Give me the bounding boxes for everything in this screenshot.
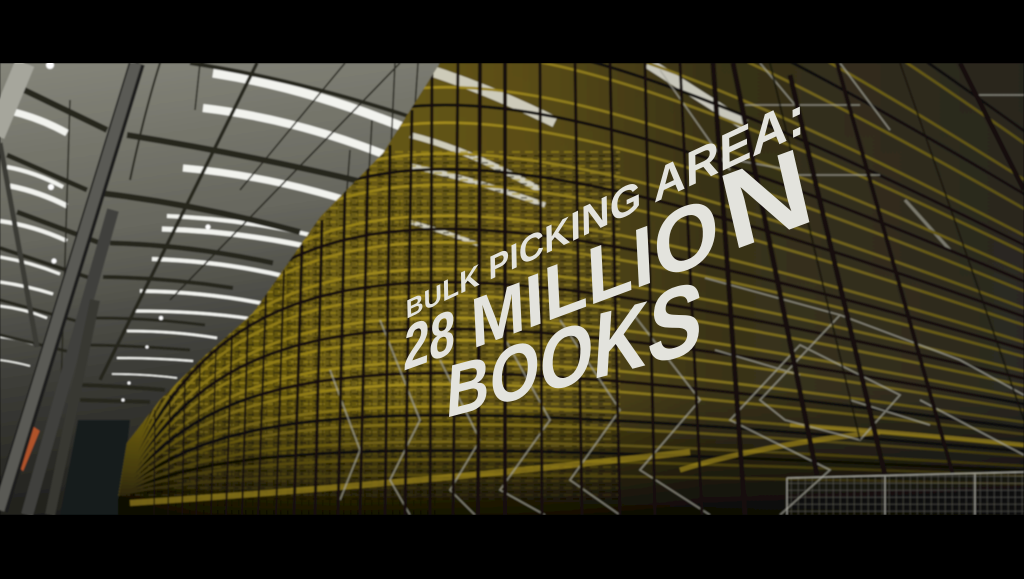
lower yellow rails [130, 425, 1024, 503]
roof beams [0, 63, 440, 420]
headline number: 28: 28 [402, 295, 457, 386]
dark shelf shadows [119, 63, 1024, 494]
ceiling lights [45, 63, 212, 403]
orange sign [20, 430, 36, 466]
warehouse photo [0, 63, 1024, 515]
structural columns [0, 63, 137, 515]
title: bulk picking area: BULK PICKING AREA: [405, 82, 806, 331]
bright roof glimpsed behind racks [410, 63, 950, 250]
far end wall [60, 420, 130, 515]
ceiling [0, 61, 470, 515]
headline: million: MILLIO [468, 177, 721, 369]
yellow shelf beams [118, 63, 1024, 498]
infographic scene [0, 63, 1024, 515]
skylights [0, 73, 415, 378]
wire fence [787, 472, 1024, 515]
shelf fleck texture [100, 150, 620, 500]
headline: books: BOOKS [444, 258, 706, 441]
rack columns [154, 63, 1024, 515]
scissor bracing [330, 63, 1024, 515]
storage racks [118, 63, 1024, 515]
headline: million, final letter: N [709, 125, 823, 274]
